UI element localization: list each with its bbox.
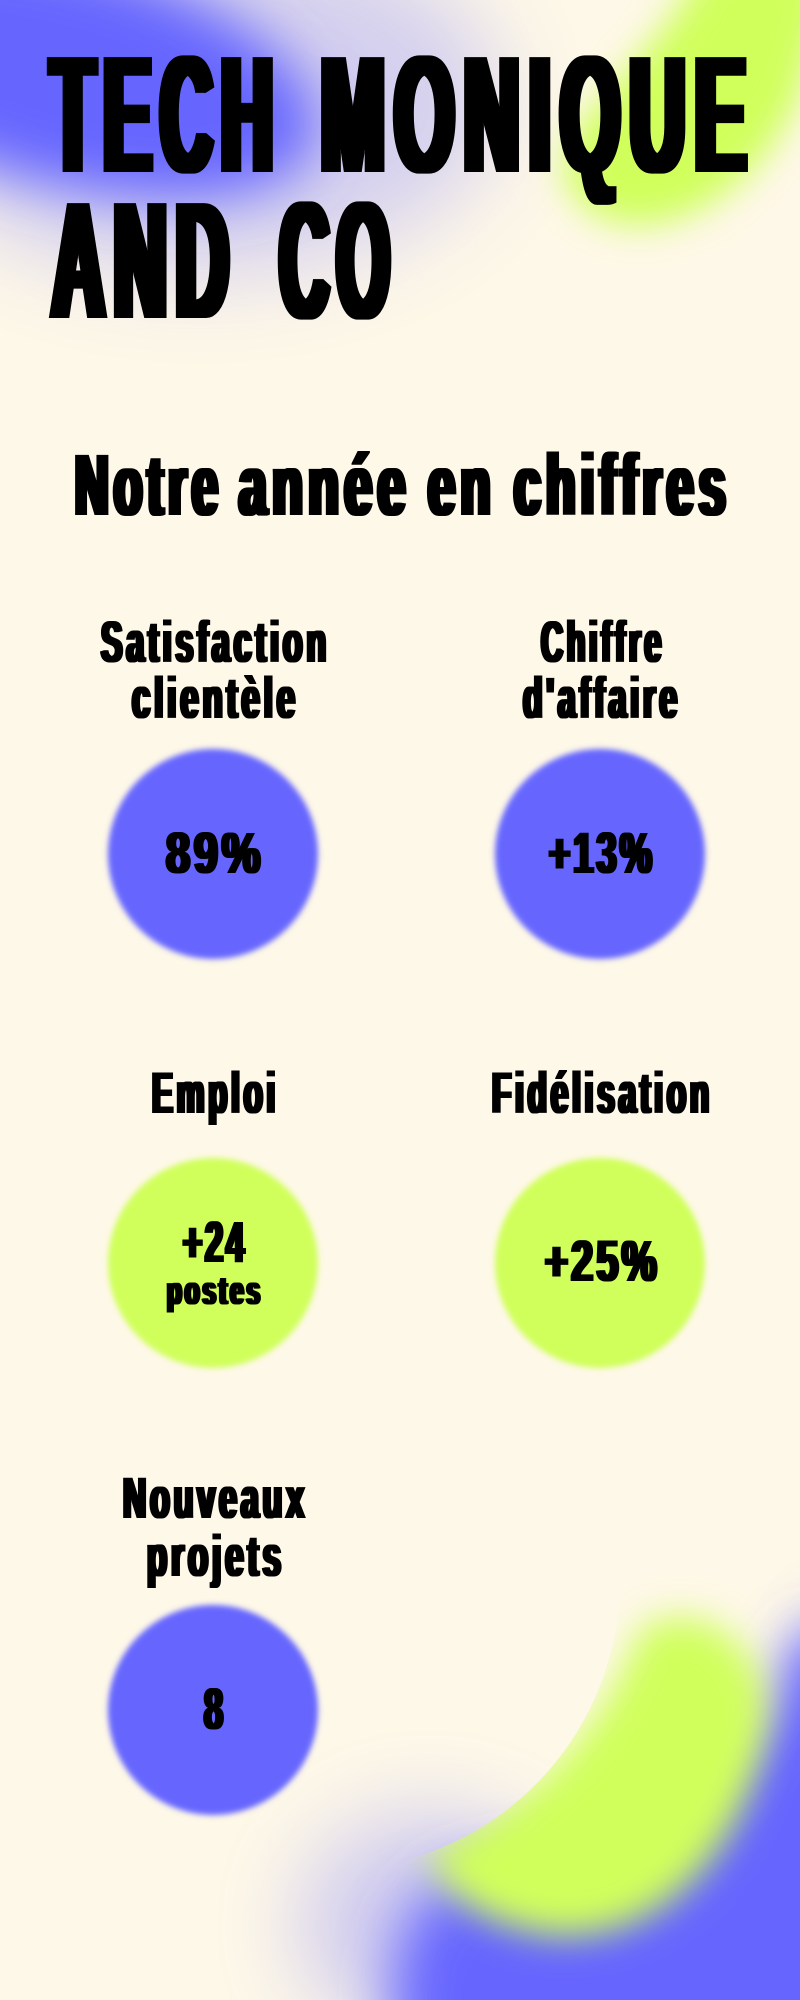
circle: nouveaux projets [108, 1605, 318, 1815]
heading: en [428, 437, 496, 534]
circle: chiffre d'affaire [495, 749, 705, 959]
title [51, 22, 756, 354]
panel: emploi [108, 1061, 318, 1368]
value: +24 postes [167, 1210, 263, 1313]
panel: fidélisation [492, 1061, 713, 1368]
panel: satisfaction clientèle [101, 610, 330, 959]
heading: Notre [75, 437, 223, 534]
value: +24 postes: +24 [183, 1210, 247, 1275]
value: +24 postes: postes [167, 1269, 263, 1313]
title: AND [52, 168, 238, 354]
label: satisfaction clientèle: Satisfaction [101, 610, 330, 675]
decorative blue blob top left [0, 0, 500, 275]
title: CO [280, 168, 398, 354]
panel: chiffre d'affaire [495, 610, 705, 959]
heading: année [239, 437, 411, 534]
value: 8: 8 [204, 1677, 226, 1742]
value: 89%: 89% [166, 821, 264, 886]
label: satisfaction clientèle [101, 610, 330, 731]
label: nouveaux projets [123, 1466, 308, 1589]
decorative green blob top right [565, 0, 800, 225]
label: chiffre d'affaire [523, 610, 681, 731]
circle: emploi [108, 1158, 318, 1368]
heading [75, 437, 731, 534]
label: nouveaux projets: Nouveaux [123, 1466, 308, 1531]
label: chiffre d'affaire: Chiffre [541, 610, 665, 675]
decorative green crescent bottom right [430, 1617, 766, 1936]
value: +25%: +25% [545, 1229, 660, 1294]
label: satisfaction clientèle: clientèle [132, 666, 299, 731]
circle: satisfaction [108, 749, 318, 959]
title: TECH [51, 22, 282, 208]
label: emploi: Emploi [152, 1061, 279, 1126]
circle: fidélisation [495, 1158, 705, 1368]
panel: nouveaux projets [108, 1466, 318, 1815]
decorative blue crescent bottom right [300, 1600, 800, 2000]
value: +13%: +13% [549, 821, 655, 886]
label: nouveaux projets: projets [147, 1524, 285, 1589]
